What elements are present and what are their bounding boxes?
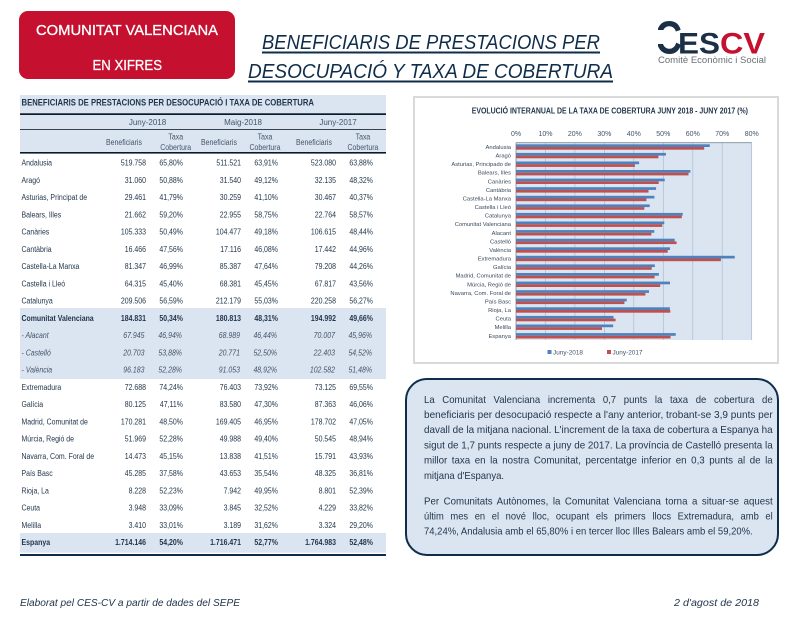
category labels: Castelló: [490, 239, 511, 245]
row: Andalusia: [21, 158, 373, 168]
row: Navarra: 15.791: [315, 451, 336, 461]
row: País Basc: 48.325: [315, 469, 336, 478]
row: Madrid: 46,95%: [254, 417, 278, 427]
row: Galícia: [21, 400, 373, 409]
panel: commentary text box: [406, 379, 778, 555]
row: Comunitat Valenciana: 184.831: [121, 313, 146, 323]
chart title: EVOLUCIÓ INTERANUAL DE LA TAXA DE COBERTURA JUNY 2018 - JUNY 2017 (%): [472, 106, 748, 115]
row: Asturias: 40,37%: [349, 193, 373, 202]
row: Canàries: Canàries: [21, 227, 50, 237]
row: Catalunya: 220.258: [311, 296, 336, 306]
row: Alacant: [21, 331, 372, 340]
row: Ceuta: Ceuta: [21, 503, 41, 513]
axis labels: [511, 131, 759, 138]
row: Canàries: 48,44%: [349, 227, 373, 237]
row: Espanya: 52,48%: [349, 538, 373, 547]
table title and header band: Cobertura: [348, 143, 379, 152]
paragraph 2: 74,24%, Andalusia amb el 65,80% i en tercer lloc Illes Balears amb el 59,20%.: [424, 526, 753, 538]
row: València: 52,28%: [158, 365, 182, 375]
row: Galícia: 47,30%: [254, 400, 278, 409]
row: Melilla: 31,62%: [254, 520, 278, 530]
row: Extremadura: 69,55%: [349, 382, 373, 392]
row: Asturias: 41,10%: [254, 193, 278, 202]
row: Andalusia: 511.521: [216, 158, 241, 168]
row: Aragó: 49,12%: [254, 175, 278, 185]
axis labels: 70%: [715, 131, 729, 138]
row: País Basc: 35,54%: [254, 469, 278, 478]
category labels: Melilla: [495, 325, 512, 331]
row: Alacant: 70.007: [314, 331, 336, 340]
row: València: 51,48%: [348, 365, 372, 375]
row: Canàries: 106.615: [311, 227, 336, 237]
row: Castelló: [21, 348, 372, 358]
paragraph 1: sigut de 1,7 punts respecte a juny de 2017. La província de Castelló presenta la: [424, 440, 773, 452]
plot background and grid: [516, 143, 752, 340]
logo: CES-CV: [648, 12, 766, 65]
row: Navarra: 43,93%: [349, 451, 373, 461]
row: Madrid: 48,50%: [159, 417, 183, 427]
row: Ceuta: 33,82%: [349, 503, 373, 513]
row: Castella-La Manxa: 81.347: [125, 262, 146, 271]
category labels: Navarra, Com. Foral de: [450, 291, 511, 297]
row: Castella-La Manxa: 44,26%: [349, 262, 373, 271]
row: Aragó: 32.135: [315, 175, 336, 185]
legend: Juny-2017: [612, 350, 643, 356]
table title and header band: Taxa: [258, 132, 273, 142]
paragraph 1: mitjana d'Espanya.: [424, 470, 504, 482]
title: [248, 32, 613, 83]
row: Rioja: 49,95%: [254, 486, 278, 496]
row: Alacant: 46,44%: [253, 331, 277, 340]
row: Alacant: - Alacant: [21, 331, 50, 340]
row: Galícia: 46,06%: [349, 400, 373, 409]
row: Galícia: 80.125: [125, 400, 146, 409]
row: Galícia: 47,11%: [160, 400, 183, 409]
row: Canàries: [21, 227, 373, 237]
row: Alacant: 45,96%: [348, 331, 372, 340]
row: Canàries: 50,49%: [159, 227, 183, 237]
axis labels: 30%: [597, 131, 611, 138]
table title and header band: Taxa: [356, 132, 371, 142]
row: Alacant: 67.945: [123, 331, 145, 340]
row: Castella-La Manxa: 47,64%: [254, 262, 278, 271]
row: Asturias: Asturias, Principat de: [21, 193, 87, 202]
row: Cantàbria: 16.466: [125, 244, 146, 254]
row: Rioja: 7.942: [224, 486, 241, 496]
row: Castella i Lleó: 45,45%: [254, 279, 278, 289]
row: Canàries: 49,18%: [254, 227, 278, 237]
row: Alacant: 46,94%: [158, 331, 182, 340]
row: Melilla: 3.410: [129, 520, 146, 530]
highlight band: Espanya: [20, 533, 386, 553]
row: Rioja: 8.228: [129, 486, 146, 496]
row: Catalunya: 209.506: [121, 296, 146, 306]
paragraph 1: millor taxa en la nostra Comunitat, percentatge inferior en 0,3 punts al de la: [424, 454, 773, 466]
category labels: Ceuta: [496, 317, 512, 323]
row: Castella i Lleó: [21, 279, 373, 289]
row: Castelló: 54,52%: [348, 348, 372, 358]
panel: data table: [20, 95, 386, 556]
row: València: 48,92%: [253, 365, 277, 375]
row: Ceuta: 3.948: [129, 503, 146, 513]
row: Comunitat Valenciana: 49,66%: [349, 313, 373, 323]
row: Rioja: Rioja, La: [21, 486, 50, 496]
category labels: Extremadura: [478, 256, 512, 262]
row: Ceuta: 33,09%: [159, 503, 183, 513]
row: Madrid: [21, 417, 373, 427]
row: Melilla: 3.324: [319, 520, 336, 530]
row: Balears: 58,57%: [349, 210, 373, 220]
paragraph 1: davall de la mitjana nacional. L'increment de la taxa de cobertura a Espanya ha: [424, 424, 773, 436]
highlight band: Comunitat Valenciana: [20, 308, 386, 379]
row: Navarra: 14.473: [125, 451, 146, 461]
row: Castelló: 20.703: [122, 348, 145, 358]
row: Canàries: 104.477: [216, 227, 241, 237]
row: País Basc: 43.653: [220, 469, 241, 478]
row: Múrcia: 48,94%: [349, 434, 373, 444]
axis labels: 20%: [568, 131, 582, 138]
row: València: 102.582: [310, 365, 336, 375]
row: Espanya: 54,20%: [159, 538, 183, 547]
row: Castella i Lleó: 45,40%: [159, 279, 183, 289]
row: Castelló: 22.403: [313, 348, 336, 358]
row: Espanya: 1.716.471: [210, 538, 241, 547]
row: Múrcia: 52,28%: [159, 434, 183, 444]
category labels: València: [489, 248, 512, 254]
row: Castella i Lleó: 64.315: [125, 279, 146, 289]
row: Andalusia: 519.758: [121, 158, 146, 168]
paragraph 1: [424, 394, 773, 482]
row: València: [21, 365, 372, 375]
row: Catalunya: 55,03%: [254, 296, 278, 306]
axis labels: 50%: [656, 131, 670, 138]
row: Canàries: 105.333: [121, 227, 146, 237]
category labels: Cantàbria: [486, 188, 512, 194]
row: Castelló: 20.771: [218, 348, 240, 358]
row: Navarra: 41,51%: [254, 451, 278, 461]
row: Comunitat Valenciana: 180.813: [216, 313, 241, 323]
row: Asturias: 41,79%: [159, 193, 183, 202]
axis labels: 80%: [745, 131, 759, 138]
row: València: - València: [21, 365, 52, 375]
category labels: Espanya: [488, 334, 512, 340]
row: Cantàbria: 47,56%: [159, 244, 183, 254]
row: Andalusia: Andalusia: [21, 158, 53, 168]
table title and header band: Beneficiaris: [296, 138, 332, 147]
category labels: [450, 145, 512, 340]
row: Andalusia: 63,91%: [254, 158, 278, 168]
row: Cantàbria: 17.442: [315, 244, 336, 254]
row: Aragó: Aragó: [21, 175, 40, 185]
panel: bar chart: [414, 97, 778, 363]
row: Múrcia: 49,40%: [254, 434, 278, 444]
row: Ceuta: [21, 503, 373, 513]
footer: date: 2 d'agost de 2018: [673, 598, 759, 609]
row: Castella i Lleó: 43,56%: [349, 279, 373, 289]
row: Catalunya: [21, 296, 373, 306]
category labels: Múrcia, Regió de: [467, 282, 511, 288]
row: Navarra: 13.838: [220, 451, 241, 461]
row: Extremadura: 74,24%: [159, 382, 183, 392]
paragraph 1: La Comunitat Valenciana incrementa 0,7 punts la taxa de cobertura de: [424, 394, 773, 406]
row: Espanya: 1.764.983: [305, 538, 336, 547]
row: Madrid: 169.405: [216, 417, 241, 427]
row: Espanya: Espanya: [21, 538, 51, 547]
table title and header band: Juny-2017: [319, 118, 357, 127]
category labels: Balears, Illes: [478, 171, 511, 177]
category labels: Asturias, Principado de: [451, 162, 511, 168]
bars: June 2018: [516, 144, 735, 336]
row: Catalunya: 212.179: [216, 296, 241, 306]
row: Espanya: 52,77%: [254, 538, 278, 547]
category labels: País Basc: [485, 299, 511, 305]
row: Ceuta: 32,52%: [254, 503, 278, 513]
row: Galícia: 87.363: [315, 400, 336, 409]
category labels: Galícia: [493, 265, 512, 271]
row: Andalusia: 523.080: [311, 158, 336, 168]
footer: source: Elaborat pel CES-CV a partir de dades del SEPE: [20, 598, 240, 609]
row: Navarra: [21, 451, 373, 461]
red badge: Comunitat Valenciana en xifres: EN XIFRES: [92, 57, 162, 74]
row: País Basc: [21, 469, 373, 478]
row: Castelló: 53,88%: [158, 348, 182, 358]
row: Balears: [21, 210, 373, 220]
title: DESOCUPACIÓ Y TAXA DE COBERTURA: [248, 60, 613, 83]
row: Andalusia: 65,80%: [159, 158, 183, 168]
category labels: Rioja, La: [488, 308, 512, 314]
row: Comunitat Valenciana: 194.992: [311, 313, 336, 323]
row: Extremadura: 73,92%: [254, 382, 278, 392]
paragraph 2: últim mes en el nové lloc, ocupant els primers llocs Extremadura, amb el: [424, 510, 773, 522]
category labels: Comunitat Valenciana: [455, 222, 512, 228]
row: Rioja: 8.801: [319, 486, 336, 496]
row: Madrid: Madrid, Comunitat de: [21, 417, 88, 427]
row: Aragó: [21, 175, 373, 185]
row: Castella-La Manxa: [21, 262, 373, 271]
row: Castella-La Manxa: Castella-La Manxa: [21, 262, 80, 271]
row: Extremadura: [21, 382, 373, 392]
legend: [548, 350, 643, 356]
row: Asturias: [21, 193, 373, 202]
row: Navarra: 45,15%: [159, 451, 183, 461]
category labels: Alacant: [492, 231, 511, 237]
logo: CES-CV: C: [655, 12, 682, 64]
row: Galícia: 83.580: [220, 400, 241, 409]
row: València: 96.183: [123, 365, 145, 375]
row: Ceuta: 4.229: [319, 503, 336, 513]
table title and header band: Cobertura: [250, 143, 281, 152]
table title and header band: Juny-2018: [129, 118, 167, 127]
table title and header band: BENEFICIARIS DE PRESTACIONS PER DESOCUPACIÓ I TAXA DE COBERTURA: [22, 96, 314, 108]
table title and header band: Beneficiaris: [201, 138, 237, 147]
category labels: Castella i Lleó: [475, 205, 511, 211]
row: Aragó: 50,88%: [159, 175, 183, 185]
category labels: Aragó: [496, 154, 511, 160]
row: Cantàbria: 17.116: [220, 244, 241, 254]
table title and header band: Taxa: [168, 132, 184, 142]
axis labels: 0%: [511, 131, 521, 138]
row: Ceuta: 3.845: [224, 503, 241, 513]
row: Balears: 22.955: [220, 210, 241, 220]
table title and header band: Maig-2018: [224, 118, 262, 127]
row: Balears: 58,75%: [254, 210, 278, 220]
row: Múrcia: 50.545: [315, 434, 336, 444]
row: Aragó: 48,32%: [349, 175, 373, 185]
row: Comunitat Valenciana: [21, 313, 373, 323]
table rows: [21, 158, 373, 547]
row: Cantàbria: Cantàbria: [21, 244, 52, 254]
row: Extremadura: 76.403: [220, 382, 241, 392]
row: Aragó: 31.540: [220, 175, 241, 185]
red badge: Comunitat Valenciana en xifres: [19, 11, 235, 79]
row: Asturias: 30.259: [220, 193, 241, 202]
category labels: Catalunya: [485, 214, 512, 220]
axis labels: 10%: [538, 131, 553, 138]
row: Castella i Lleó: 67.817: [315, 279, 336, 289]
table title and header band: Beneficiaris: [106, 138, 142, 147]
row: Cantàbria: 44,96%: [349, 244, 373, 254]
row: Alacant: 68.989: [219, 331, 241, 340]
row: País Basc: 36,81%: [349, 469, 373, 478]
row: Aragó: 31.060: [125, 175, 146, 185]
row: Balears: 22.764: [315, 210, 336, 220]
row: Melilla: [21, 520, 373, 530]
row: Balears: 21.662: [125, 210, 146, 220]
paragraph 2: [424, 496, 773, 538]
row: Madrid: 178.702: [311, 417, 336, 427]
category labels: Castella-La Manxa: [463, 196, 512, 202]
row: Espanya: [21, 538, 373, 547]
axis labels: 60%: [686, 131, 700, 138]
row: Rioja: 52,39%: [349, 486, 373, 496]
row: Melilla: Melilla: [21, 520, 42, 530]
row: Castella i Lleó: 68.381: [220, 279, 241, 289]
row: Asturias: 29.461: [125, 193, 146, 202]
row: País Basc: País Basc: [21, 469, 53, 478]
row: Madrid: 170.281: [121, 417, 146, 427]
row: Comunitat Valenciana: Comunitat Valenciana: [21, 313, 94, 323]
legend: Juny-2018: [553, 350, 583, 356]
logo: CES-CV: ES: [678, 28, 720, 60]
row: Castella-La Manxa: 85.387: [220, 262, 241, 271]
row: Melilla: 33,01%: [159, 520, 183, 530]
bars: June 2017: [516, 147, 721, 338]
row: Comunitat Valenciana: 50,34%: [159, 313, 183, 323]
row: València: 91.053: [219, 365, 241, 375]
row: Cantàbria: [21, 244, 373, 254]
row: Castelló: 52,50%: [253, 348, 277, 358]
row: Extremadura: 73.125: [315, 382, 336, 392]
axis labels: 40%: [627, 131, 641, 138]
row: Asturias: 30.467: [315, 193, 336, 202]
row: Extremadura: Extremadura: [21, 382, 62, 392]
row: Catalunya: Catalunya: [21, 296, 54, 306]
row: Melilla: 29,20%: [349, 520, 373, 530]
row: Extremadura: 72.688: [125, 382, 146, 392]
row: País Basc: 37,58%: [159, 469, 183, 478]
title: BENEFICIARIS DE PRESTACIONS PER: [262, 32, 600, 54]
red badge: Comunitat Valenciana en xifres: COMUNITAT VALENCIANA: [36, 22, 218, 39]
row: Espanya: 1.714.146: [115, 538, 146, 547]
logo: CES-CV: CV: [720, 28, 765, 60]
row: Rioja: 52,23%: [159, 486, 183, 496]
row: Rioja: [21, 486, 373, 496]
row: Balears: 59,20%: [159, 210, 183, 220]
row: País Basc: 45.285: [125, 469, 146, 478]
paragraph 1: beneficiaris per desocupació respecte a l'any anterior, trobant-se 3,9 punts per: [424, 409, 773, 421]
table title and header band: Cobertura: [160, 143, 192, 152]
table title and header band: [20, 95, 386, 154]
row: Madrid: 47,05%: [349, 417, 373, 427]
row: Múrcia: 51.969: [125, 434, 146, 444]
category labels: Andalusia: [486, 145, 512, 151]
row: Catalunya: 56,27%: [349, 296, 373, 306]
category labels: Canàries: [488, 179, 511, 185]
row: Castella-La Manxa: 46,99%: [159, 262, 183, 271]
row: Castella-La Manxa: 79.208: [315, 262, 336, 271]
paragraph 2: Per Comunitats Autònomes, la Comunitat Valenciana torna a situar-se aquest: [424, 496, 773, 508]
row: Catalunya: 56,59%: [159, 296, 183, 306]
row: Comunitat Valenciana: 48,31%: [254, 313, 278, 323]
logo: CES-CV: Comitè Econòmic i Social: [658, 55, 766, 65]
row: Múrcia: Múrcia, Regió de: [21, 434, 74, 444]
row: Galícia: Galícia: [21, 400, 44, 409]
row: Múrcia: [21, 434, 373, 444]
row: Navarra: Navarra, Com. Foral de: [21, 451, 94, 461]
row: Andalusia: 63,88%: [349, 158, 373, 168]
category labels: Madrid, Comunitat de: [456, 274, 511, 280]
row: Cantàbria: 46,08%: [254, 244, 278, 254]
row: Múrcia: 49.988: [220, 434, 241, 444]
row: Melilla: 3.189: [224, 520, 241, 530]
row: Castella i Lleó: Castella i Lleó: [21, 279, 65, 289]
row: Castelló: - Castelló: [21, 348, 51, 358]
row: Balears: Balears, Illes: [21, 210, 61, 220]
